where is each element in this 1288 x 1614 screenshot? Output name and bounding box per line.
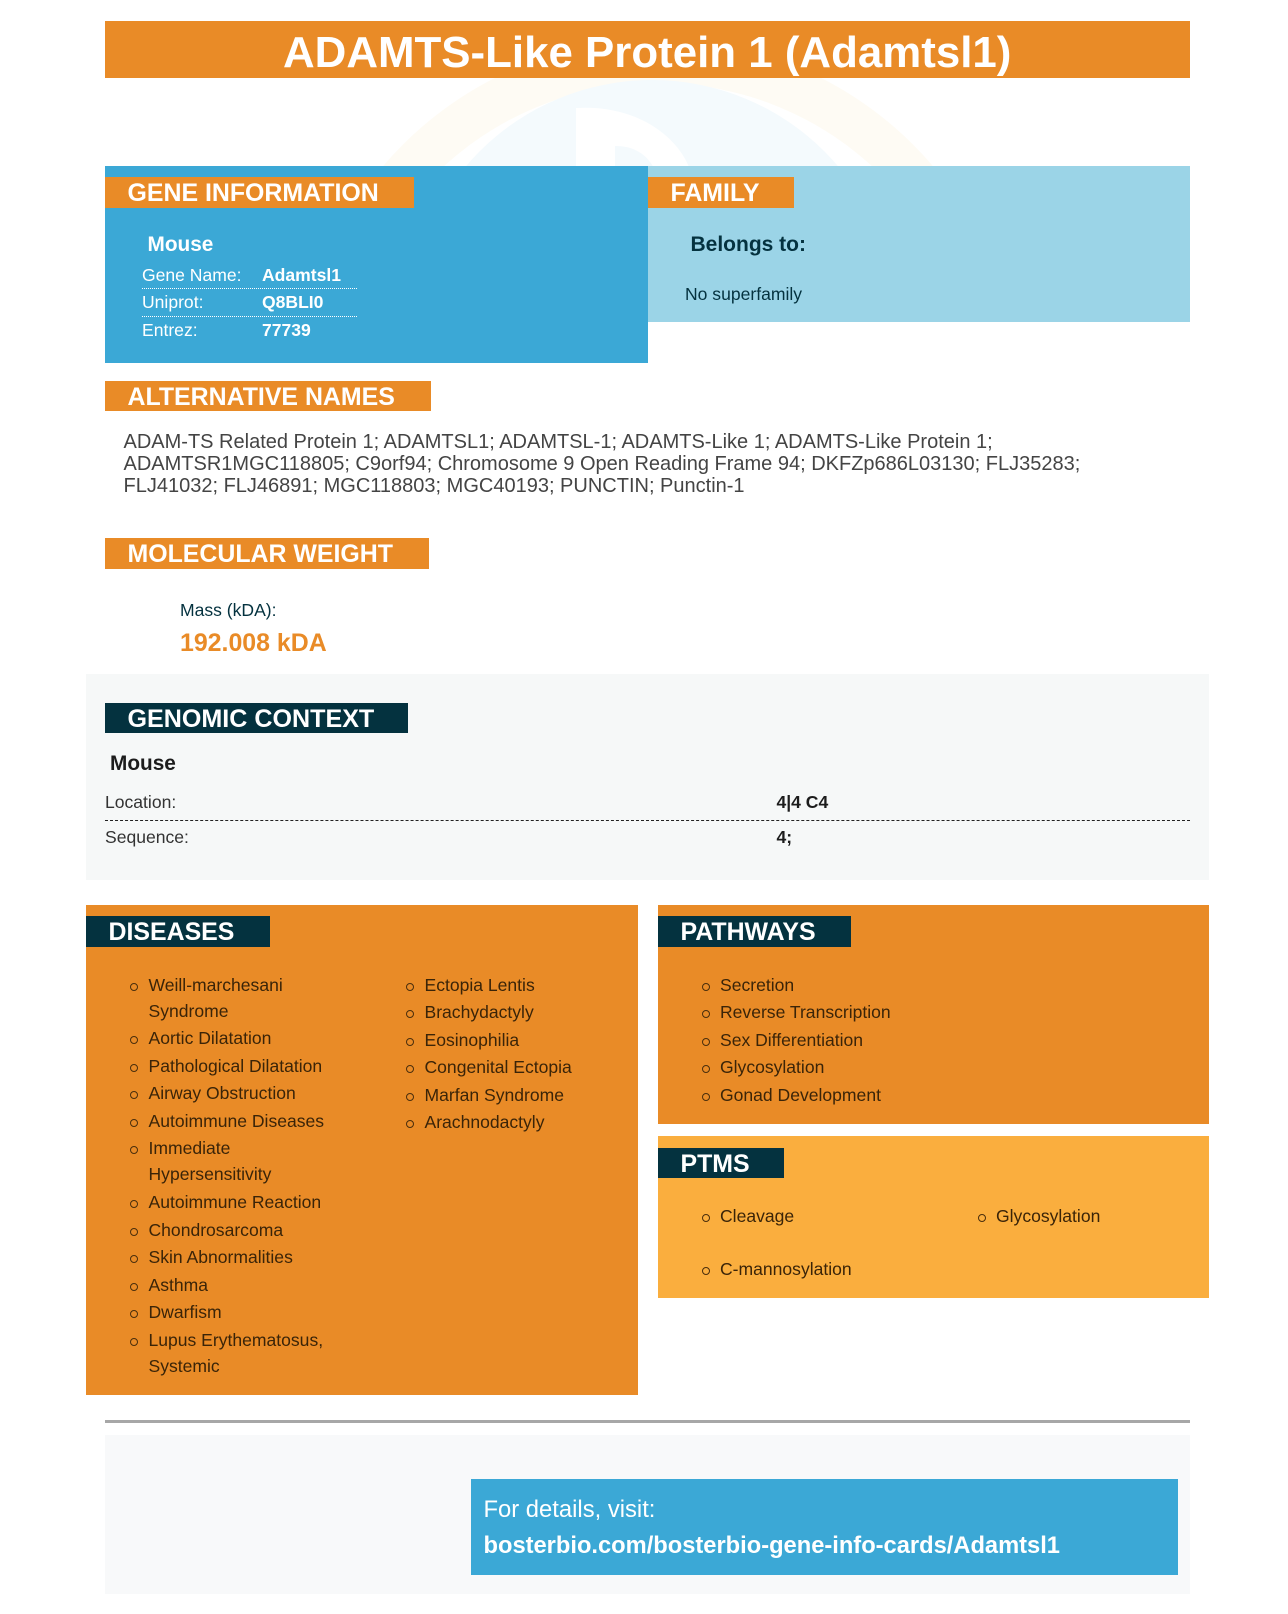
disease list: column 1: Aortic Dilatation [148,1028,271,1048]
species: mouse: Mouse [110,752,176,774]
divider rule [105,1420,1190,1423]
uniprot row [142,289,357,317]
disease list: column 1: Autoimmune Diseases [148,1111,324,1131]
heading: diseases: DISEASES [108,918,234,946]
panel: genomic context [86,674,1209,880]
heading: genomic context: GENOMIC CONTEXT [128,705,374,733]
disease list: column 1: Skin Abnormalities [148,1247,293,1267]
alternative names text: FLJ41032; FLJ46891; MGC118803; MGC40193; PUNCTIN; Punctin-1 [124,475,745,497]
disease list: column 2: Ectopia Lentis [424,975,535,995]
disease list: column 1: Chondrosarcoma [148,1220,283,1240]
heading: pathways [658,916,851,947]
disease list: column 1: Autoimmune Reaction [148,1192,321,1212]
heading: family: FAMILY [670,179,759,207]
disease list: column 2: Congenital Ectopia [424,1057,572,1077]
watermark logo [384,78,932,166]
disease list: column 1: Dwarfism [148,1302,222,1322]
title: ADAMTS-Like Protein 1 (Adamtsl1) [283,28,1011,77]
gene name row: Gene Name: [142,265,241,285]
title [105,21,1190,78]
uniprot row: Uniprot: [142,292,203,312]
sequence row [105,826,792,846]
ptms list: Glycosylation [996,1206,1100,1226]
disease list: column 2 [406,975,572,1132]
pathways list: Sex Differentiation [720,1030,863,1050]
heading: gene information: GENE INFORMATION [128,179,379,207]
disease list: column 2: Marfan Syndrome [424,1085,564,1105]
footer panel [105,1435,1190,1594]
belongs to label: Belongs to: [690,232,806,256]
panel: pathways [658,905,1209,1124]
location row: 4|4 C4 [776,792,828,812]
ptms list: C-mannosylation [720,1259,852,1279]
entrez row: 77739 [262,320,311,340]
mass value: 192.008 kDA [180,629,327,657]
disease list: column 1: Immediate [148,1138,230,1158]
ptms list: Cleavage [720,1206,794,1226]
entrez row: Entrez: [142,320,198,340]
heading: ptms: PTMS [680,1150,750,1178]
disease list: column 1: Pathological Dilatation [148,1056,322,1076]
ptms list [702,1206,1100,1279]
uniprot row: Q8BLI0 [262,292,323,312]
heading: molecular weight: MOLECULAR WEIGHT [128,540,393,568]
gene name row: Adamtsl1 [262,265,341,285]
panel: ptms [658,1136,1209,1298]
heading: pathways: PATHWAYS [680,918,816,946]
disease list: column 1 [130,975,324,1376]
pathways list: Reverse Transcription [720,1002,891,1022]
location row: Location: [105,792,176,812]
alternative names text [124,431,1080,497]
pathways list: Glycosylation [720,1057,824,1077]
panel: family [648,166,1190,322]
heading: diseases [86,916,270,947]
mass label: Mass (kDA): [180,600,277,620]
disease list: column 1: Weill-marchesani [148,975,283,995]
callout text: for details: For details, visit: [484,1496,655,1523]
disease list: column 1: Lupus Erythematosus, [148,1330,323,1350]
panel: gene information [105,166,648,363]
disease list: column 1: Asthma [148,1275,208,1295]
heading: family [648,177,794,208]
disease list: column 2: Arachnodactyly [424,1112,544,1132]
pathways list: Secretion [720,975,794,995]
disease list: column 1: Systemic [148,1356,220,1376]
species: mouse: Mouse [148,233,213,256]
panel: diseases [86,905,638,1395]
pathways list: Gonad Development [720,1085,881,1105]
callout text: url: bosterbio.com/bosterbio-gene-info-cards/Adamtsl1 [484,1533,1060,1559]
sequence row: 4; [776,826,792,846]
pathways list [702,975,891,1105]
disease list: column 1: Airway Obstruction [148,1083,296,1103]
disease list: column 2: Brachydactyly [424,1002,534,1022]
entrez row [142,320,311,340]
callout: details link [471,1479,1178,1575]
location row [105,788,1190,820]
disease list: column 2: Eosinophilia [424,1030,519,1050]
sequence row: Sequence: [105,826,189,846]
disease list: column 1: Hypersensitivity [148,1164,271,1184]
alternative names text: ADAM-TS Related Protein 1; ADAMTSL1; ADAMTSL-1; ADAMTS-Like 1; ADAMTS-Like Protein 1; [124,431,993,453]
superfamily value: No superfamily [685,284,802,304]
alternative names text: ADAMTSR1MGC118805; C9orf94; Chromosome 9 Open Reading Frame 94; DKFZp686L03130; FLJ35283; [124,453,1080,475]
heading: ptms [658,1148,784,1178]
heading: alternative names: ALTERNATIVE NAMES [128,383,395,411]
disease list: column 1: Syndrome [148,1001,228,1021]
gene name row [142,262,357,289]
